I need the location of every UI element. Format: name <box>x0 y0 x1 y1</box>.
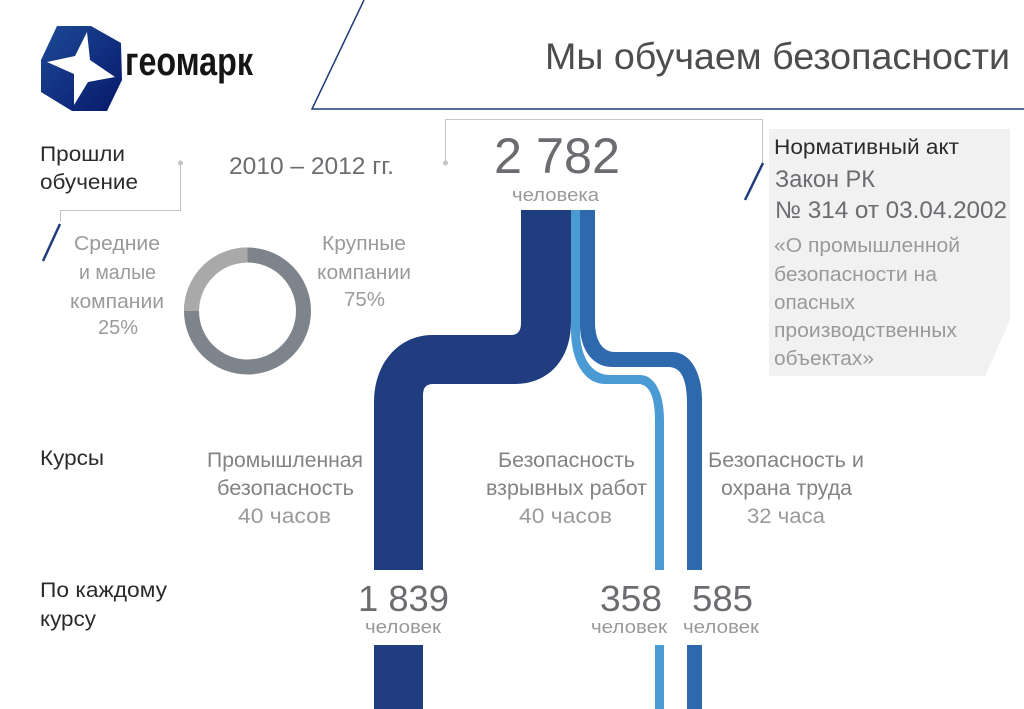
total unit: человека <box>512 185 600 205</box>
course: explosive safety: Безопасность <box>498 449 635 472</box>
course: industrial safety: безопасность <box>217 477 354 500</box>
unit: человек <box>365 617 441 637</box>
law name: безопасности на <box>774 264 938 286</box>
label: small companies: компании <box>70 291 164 313</box>
law reference: № 314 от 03.04.2002 <box>775 197 1007 224</box>
law name: объектах» <box>774 348 874 370</box>
course: occupational safety: Безопасность и <box>708 449 864 472</box>
course: occupational safety: охрана труда <box>721 477 852 500</box>
course: industrial safety: Промышленная <box>207 449 363 472</box>
logo <box>41 26 254 111</box>
figure: 1839 <box>358 578 449 637</box>
flow continuation: occupational <box>687 645 702 709</box>
accent slash right <box>745 163 763 200</box>
logo wordmark: геомарк <box>125 40 254 84</box>
period: 2010 – 2012 гг. <box>229 153 394 180</box>
section label: per course: По каждому <box>40 579 168 602</box>
law name: «О промышленной <box>774 235 960 257</box>
label: large companies: Крупные <box>322 233 406 255</box>
figure: 358: 358 <box>600 578 662 619</box>
label: small companies: и малые <box>79 262 156 284</box>
law name: производственных <box>774 320 957 342</box>
flow: occupational safety <box>580 210 702 570</box>
law name: опасных <box>774 292 855 314</box>
connector: left bracket <box>60 160 183 222</box>
flow: explosive safety <box>571 210 664 570</box>
accent slash left <box>43 224 60 261</box>
course: explosive safety: взрывных работ <box>486 477 647 500</box>
course: occupational safety: 32 часа <box>747 505 825 528</box>
donut chart <box>192 255 304 367</box>
unit: человек <box>683 617 759 637</box>
flow continuation: explosive <box>655 645 664 709</box>
header divider line <box>312 0 1024 109</box>
panel: normative act <box>769 129 1010 376</box>
section label: trained: Прошли <box>40 143 125 166</box>
flow diagram <box>374 210 702 709</box>
law reference: Закон РК <box>775 166 875 193</box>
label: large companies: 75% <box>344 289 385 311</box>
total number: 2 782 <box>494 128 620 184</box>
figure: 585: 585 <box>692 578 753 619</box>
label: large companies: компании <box>317 262 411 284</box>
figure: 358 <box>591 578 667 637</box>
figure: 585 <box>683 578 759 637</box>
label: small companies: Средние <box>74 233 160 255</box>
logo mark <box>41 26 122 111</box>
flow continuation: industrial <box>374 645 423 709</box>
figure: 1839: 1 839 <box>358 578 449 619</box>
title: Мы обучаем безопасности <box>545 36 1010 77</box>
panel heading: Нормативный акт <box>774 136 959 159</box>
label: small companies: 25% <box>98 317 138 339</box>
section label: per course: курсу <box>40 608 97 631</box>
connector: top bracket <box>443 120 762 166</box>
unit: человек <box>591 617 667 637</box>
flow: industrial safety <box>374 210 571 570</box>
course: explosive safety: 40 часов <box>519 505 612 528</box>
course: industrial safety: 40 часов <box>238 505 331 528</box>
section label: trained: обучение <box>40 171 138 194</box>
section label: courses: Курсы <box>40 447 104 470</box>
